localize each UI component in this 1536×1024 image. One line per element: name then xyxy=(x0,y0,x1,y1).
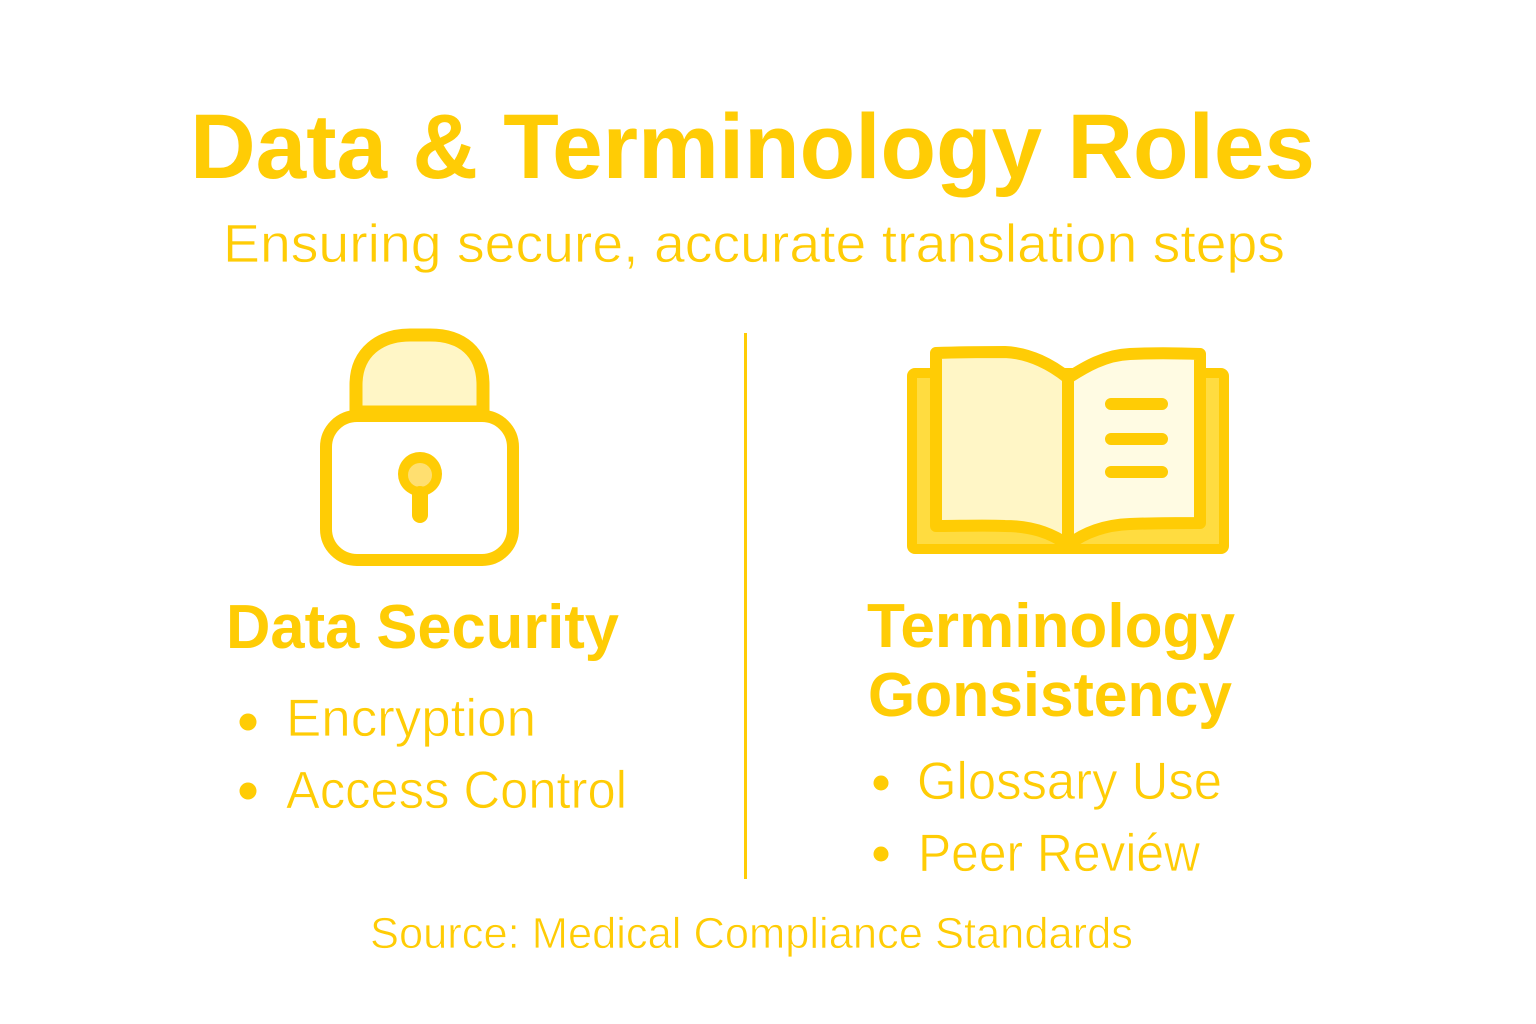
title: Data & Terminology Roles xyxy=(190,96,1315,198)
center divider xyxy=(744,333,747,879)
subtitle: Ensuring secure, accurate translation steps xyxy=(223,214,1285,274)
bullet list: terminology xyxy=(874,752,1222,883)
bullet list: data security: Access Control xyxy=(286,761,627,820)
heading: terminology consistency: Terminology xyxy=(867,592,1236,661)
bullet list: terminology: Peer Reviéw xyxy=(918,824,1201,883)
heading: data security: Data Security xyxy=(226,593,620,662)
heading: terminology consistency xyxy=(867,592,1236,730)
heading: terminology consistency: Gonsistency xyxy=(868,661,1233,730)
icon: open book xyxy=(912,352,1224,549)
source note: Source: Medical Compliance Standards xyxy=(370,909,1133,958)
bullet list: terminology: Glossary Use xyxy=(917,752,1222,811)
bullet list: data security xyxy=(240,689,627,820)
icon: padlock xyxy=(326,335,513,560)
panel: data security xyxy=(226,335,627,820)
panel: terminology consistency xyxy=(867,352,1236,883)
bullet list: data security: Encryption xyxy=(286,689,536,748)
